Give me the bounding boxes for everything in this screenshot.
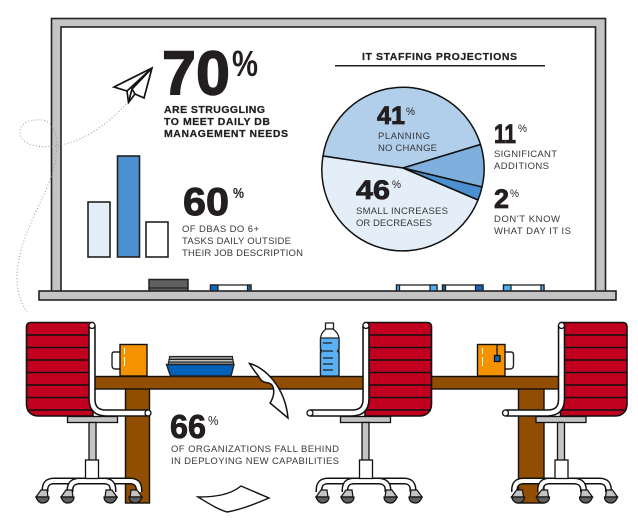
stat: 60 percent: THEIR JOB DESCRIPTION	[182, 248, 303, 259]
pie label: 46 percent: SMALL INCREASES	[356, 206, 448, 217]
stat: 70 percent: 70	[162, 40, 230, 108]
pie label: 46 percent: %	[392, 179, 401, 191]
fallen paper sheet	[198, 486, 269, 512]
chair: right	[502, 322, 627, 503]
stat: 70 percent: TO MEET DAILY DB	[164, 116, 270, 128]
pie label: 41 percent	[377, 102, 437, 154]
pie label: 2 percent: DON'T KNOW	[494, 214, 560, 225]
pie label: 11 percent: %	[518, 123, 527, 135]
heading: IT staffing projections: IT STAFFING PROJECTIONS	[362, 51, 517, 63]
stat: 60 percent: OF DBAS DO 6+	[182, 224, 259, 235]
stat: 60 percent: %	[233, 185, 244, 202]
stat: 70 percent: MANAGEMENT NEEDS	[164, 128, 288, 140]
icon: mug with tea bag	[478, 344, 514, 376]
stat: 60 percent: 60	[183, 181, 229, 224]
pie label: 41 percent: NO CHANGE	[378, 143, 437, 154]
pie label: 11 percent: ADDITIONS	[494, 161, 549, 172]
chair: middle	[307, 322, 432, 503]
pie label: 2 percent: %	[510, 188, 519, 200]
stat: 70 percent: ARE STRUGGLING	[164, 104, 265, 116]
pie label: 41 percent: PLANNING	[378, 131, 430, 142]
stat: 66 percent: OF ORGANIZATIONS FALL BEHIND	[171, 444, 339, 455]
stacked papers in tray	[166, 356, 234, 376]
stat: 70 percent: %	[232, 43, 258, 84]
stat: 66 percent	[170, 408, 339, 467]
whiteboard	[52, 18, 606, 294]
pie label: 11 percent: 11	[494, 119, 516, 149]
pie label: 11 percent: SIGNIFICANT	[494, 149, 557, 160]
pie chart	[322, 87, 484, 251]
pie label: 46 percent: OR DECREASES	[356, 218, 432, 229]
pie label: 41 percent: 41	[377, 102, 405, 130]
marker ledge	[39, 291, 616, 300]
icon: paper plane	[114, 68, 152, 102]
pie label: 2 percent: WHAT DAY IT IS	[494, 226, 571, 237]
bar chart	[88, 156, 168, 257]
stat: 60 percent	[182, 181, 303, 259]
stat: 66 percent: IN DEPLOYING NEW CAPABILITIES	[171, 456, 339, 467]
chair: left	[26, 322, 151, 503]
table	[90, 376, 565, 503]
pie label: 11 percent	[494, 119, 557, 172]
icon: orange mug	[112, 344, 147, 376]
markers	[210, 285, 544, 292]
pie label: 46 percent: 46	[356, 175, 390, 205]
stat: 66 percent: 66	[170, 408, 206, 445]
stat: 60 percent: TASKS DAILY OUTSIDE	[182, 236, 291, 247]
pie label: 46 percent	[356, 175, 448, 229]
dotted flight path	[17, 104, 126, 312]
pie label: 2 percent: 2	[494, 184, 509, 214]
eraser	[149, 280, 188, 292]
stat: 66 percent: %	[208, 414, 218, 428]
pie label: 2 percent	[494, 184, 571, 237]
icon: water bottle	[320, 323, 339, 376]
pie label: 41 percent: %	[406, 106, 415, 118]
falling paper sheet, curled	[250, 364, 288, 418]
stat: 70 percent	[162, 40, 288, 140]
